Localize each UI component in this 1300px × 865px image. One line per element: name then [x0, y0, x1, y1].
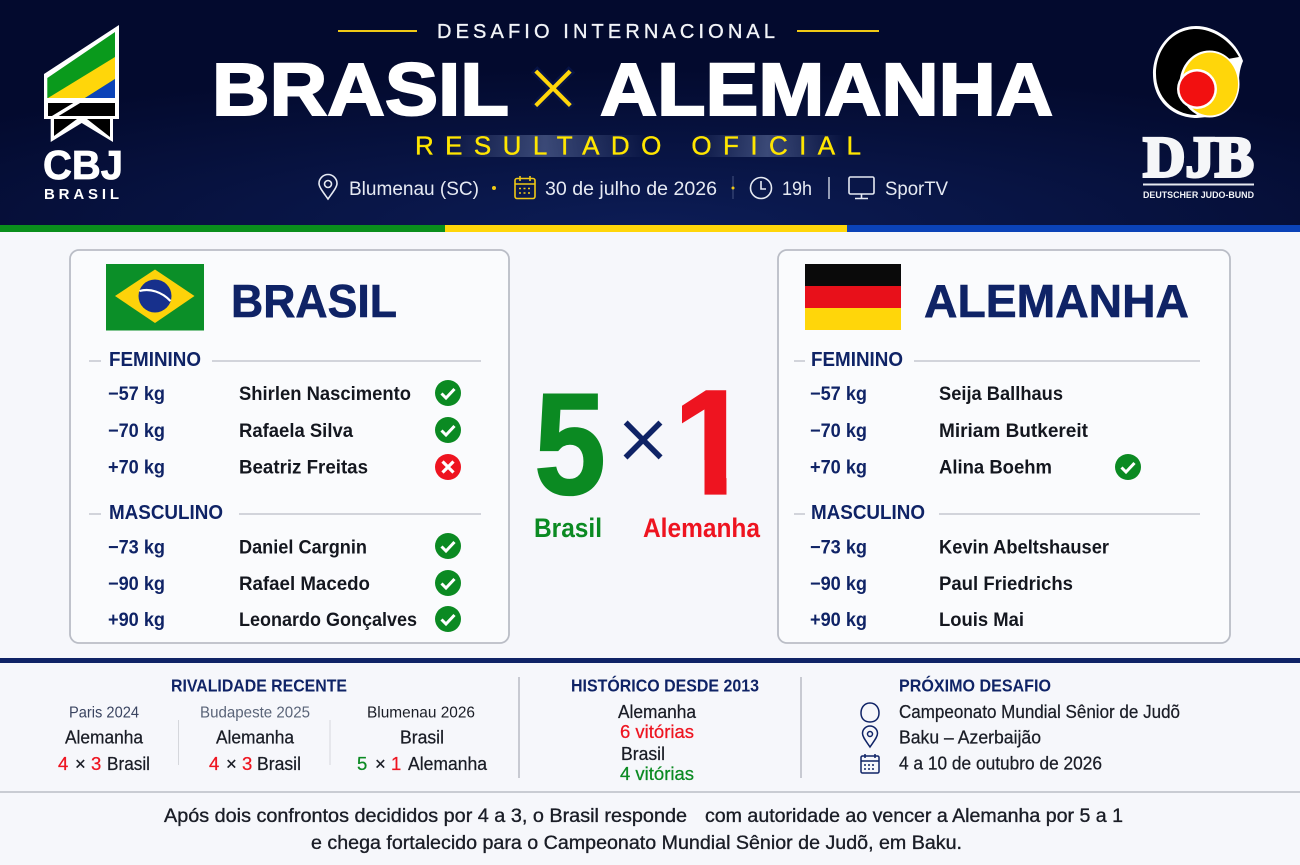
section: Alemanha feminino: +70 kg: [810, 458, 867, 478]
subtitle: Resultado Oficial: RESULTADO OFICIAL: [415, 130, 861, 160]
panel: Rivalidade recente: Brasil: [400, 726, 444, 748]
icon: win: [435, 417, 461, 443]
panel: Proximo desafio: Campeonato Mundial Sênior de Judõ: [899, 701, 1180, 722]
section: Alemanha feminino: −70 kg: [810, 421, 867, 442]
panel: Rivalidade recente: 1: [391, 753, 401, 774]
section: Brasil masculino: [89, 502, 481, 632]
panel: Rivalidade recente: Paris 2024: [69, 704, 139, 722]
title: Brasil x Alemanha: [212, 37, 1053, 139]
section: Brasil masculino: MASCULINO: [109, 502, 223, 524]
final score: Alemanha: [643, 513, 761, 543]
section: Brasil feminino: −57 kg: [108, 384, 165, 405]
panel: Rivalidade recente: 3: [91, 753, 101, 774]
section: Alemanha feminino: −57 kg: [810, 384, 867, 405]
panel: Historico desde 2013: [571, 674, 759, 784]
section: Alemanha feminino: Seija Ballhaus: [939, 383, 1063, 405]
panel: Rivalidade recente: Brasil: [107, 753, 150, 774]
eyebrow: Desafio Internacional: DESAFIO INTERNACIONAL: [437, 21, 775, 43]
section: Alemanha masculino: Kevin Abeltshauser: [939, 536, 1109, 558]
panel: Proximo desafio: Baku – Azerbaijão: [899, 726, 1041, 748]
panel: Historico desde 2013: HISTÓRICO DESDE 2013: [571, 674, 759, 696]
panel: Rivalidade recente: ×: [375, 753, 386, 774]
footer summary: [164, 805, 1123, 854]
panel: Rivalidade recente: ×: [75, 753, 86, 774]
panel: Alemanha team: [778, 250, 1230, 643]
icon: clock: [750, 178, 772, 198]
section: Brasil feminino: FEMININO: [109, 349, 201, 371]
final score: [536, 390, 760, 538]
section: Brasil feminino: Shirlen Nascimento: [239, 383, 411, 405]
final score: Brasil: [534, 513, 602, 543]
logo: DJB: [1143, 26, 1254, 201]
footer summary: e chega fortalecido para o Campeonato Mundial Sênior de Judõ, em Baku.: [311, 832, 962, 854]
title: Brasil x Alemanha: ALEMANHA: [600, 48, 1053, 131]
section: Alemanha feminino: FEMININO: [811, 349, 903, 371]
icon: win: [435, 570, 461, 596]
section: Alemanha feminino: [794, 349, 1200, 480]
section: Alemanha masculino: MASCULINO: [811, 502, 925, 524]
section: Alemanha masculino: Paul Friedrichs: [939, 573, 1073, 595]
panel: Rivalidade recente: Alemanha: [216, 726, 295, 748]
icon: Germany flag: [805, 264, 901, 330]
icon: Brazil flag: [106, 264, 204, 330]
panel: Rivalidade recente: Alemanha: [65, 726, 144, 748]
final score: ×: [617, 390, 669, 490]
panel: Rivalidade recente: [58, 676, 488, 774]
panel: Rivalidade recente: RIVALIDADE RECENTE: [171, 676, 347, 696]
logo: CBJ Brasil: BRASIL: [44, 186, 119, 203]
panel: Historico desde 2013: Alemanha: [618, 701, 697, 722]
title: Brasil x Alemanha: ×: [526, 37, 580, 139]
icon: judo head: [861, 703, 879, 722]
icon: calendar: [515, 176, 535, 198]
section: Alemanha feminino: Alina Boehm: [939, 456, 1052, 478]
section: Brasil feminino: [89, 349, 481, 480]
tricolor stripe: [0, 225, 1300, 232]
logo: CBJ Brasil: [43, 25, 123, 203]
panel: Rivalidade recente: Alemanha: [408, 753, 488, 774]
section: Alemanha masculino: −90 kg: [810, 574, 867, 595]
section: Brasil feminino: Rafaela Silva: [239, 420, 353, 442]
section: Alemanha masculino: [794, 502, 1200, 631]
panel: Rivalidade recente: Budapeste 2025: [200, 704, 310, 722]
panel: Rivalidade recente: 3: [242, 753, 252, 774]
section: Brasil feminino: Beatriz Freitas: [239, 456, 368, 478]
event details row: 30 de julho de 2026: [545, 179, 717, 200]
icon: win: [435, 606, 461, 632]
event details row: Blumenau (SC): [349, 179, 479, 200]
panel: Historico desde 2013: 6 vitórias: [620, 721, 694, 742]
section: Brasil feminino: −70 kg: [108, 421, 165, 442]
final score: 5: [534, 363, 606, 525]
event details row: [319, 174, 948, 200]
icon: win: [435, 380, 461, 406]
header banner: [0, 0, 1300, 225]
panel: Rivalidade recente: 5: [357, 753, 367, 774]
section: Brasil masculino: −73 kg: [108, 538, 165, 558]
panel: Proximo desafio: 4 a 10 de outubro de 2026: [899, 752, 1102, 774]
panel: Rivalidade recente: 4: [209, 753, 219, 774]
icon: win: [1115, 454, 1141, 480]
section: Brasil masculino: Daniel Cargnin: [239, 536, 367, 558]
panel: Rivalidade recente: ×: [226, 753, 237, 774]
section: Alemanha masculino: +90 kg: [810, 610, 867, 631]
final score: 1: [670, 358, 753, 526]
heading: Alemanha: ALEMANHA: [924, 275, 1189, 327]
icon: monitor: [849, 177, 874, 198]
section: Brasil masculino: Rafael Macedo: [239, 573, 370, 595]
panel: Rivalidade recente: Blumenau 2026: [367, 704, 475, 722]
panel: Proximo desafio: PRÓXIMO DESAFIO: [899, 674, 1051, 696]
title: Brasil x Alemanha: BRASIL: [212, 48, 509, 131]
section: Alemanha masculino: Louis Mai: [939, 609, 1024, 631]
logo: DJB: DJB: [1143, 124, 1254, 190]
panel: Historico desde 2013: 4 vitórias: [620, 763, 694, 784]
heading: Brasil: BRASIL: [231, 275, 397, 327]
section: Brasil masculino: Leonardo Gonçalves: [239, 609, 417, 631]
event details row: 19h: [782, 179, 812, 200]
section: Alemanha feminino: Miriam Butkereit: [939, 420, 1088, 442]
panel: Historico desde 2013: Brasil: [621, 743, 665, 764]
footer summary: Após dois confrontos decididos por 4 a 3, o Brasil responde: [164, 805, 687, 827]
panel: Brasil team: [70, 250, 509, 643]
panel: Rivalidade recente: Brasil: [257, 753, 301, 774]
icon: loss: [435, 454, 461, 480]
panel: Rivalidade recente: 4: [58, 753, 68, 774]
icon: win: [435, 533, 461, 559]
icon: calendar: [861, 754, 879, 773]
panel: Proximo desafio: [861, 674, 1180, 774]
icon: location pin: [862, 726, 878, 747]
footer summary: com autoridade ao vencer a Alemanha por 5 a 1: [705, 805, 1123, 827]
section: Brasil feminino: +70 kg: [108, 458, 165, 478]
icon: location pin: [319, 174, 337, 199]
section: Brasil masculino: +90 kg: [108, 610, 165, 631]
section: Alemanha masculino: −73 kg: [810, 538, 867, 558]
event details row: SporTV: [885, 179, 948, 200]
bottom info band: [0, 658, 1300, 793]
section: Brasil masculino: −90 kg: [108, 574, 165, 595]
logo: CBJ Brasil: CBJ: [43, 142, 123, 188]
logo: DJB: DEUTSCHER JUDO-BUND: [1143, 190, 1254, 201]
